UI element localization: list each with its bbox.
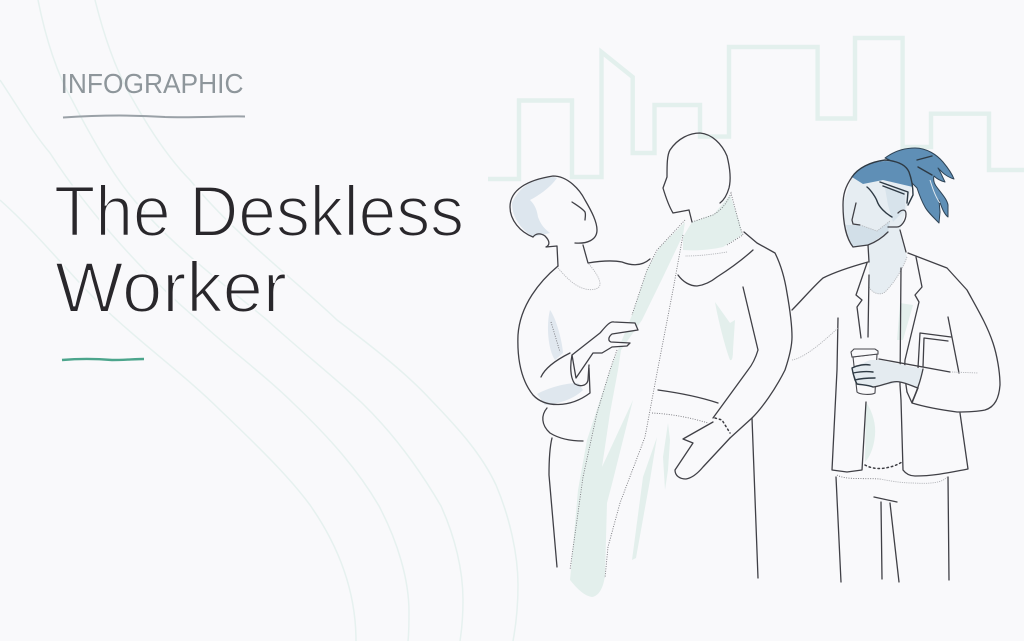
body [518, 266, 590, 405]
ponytail highlight [930, 180, 940, 203]
background curves [0, 0, 518, 641]
sweater [678, 250, 753, 286]
title [54, 173, 464, 328]
label underline [63, 116, 245, 118]
title: Worker [55, 249, 287, 328]
hand [572, 322, 638, 378]
title accent line [62, 359, 144, 360]
title: The Deskless [54, 173, 464, 252]
right leg [752, 418, 758, 578]
hair [852, 161, 913, 187]
ear and neck [533, 234, 558, 266]
trousers [836, 477, 949, 582]
beard and shade [846, 221, 890, 247]
face outline [843, 177, 888, 247]
face fill [843, 170, 912, 294]
neckline [558, 263, 600, 290]
sleeve shade [548, 310, 563, 360]
belly dots [865, 462, 902, 469]
waistband [837, 475, 880, 479]
ponytail [885, 148, 954, 223]
chest and belly shade [897, 303, 913, 340]
scarf outlines [692, 193, 743, 245]
lower body and leg [543, 408, 583, 441]
hair strands [867, 187, 892, 217]
jacket [792, 262, 868, 310]
scarf shade [570, 222, 685, 597]
hair shade [512, 177, 557, 237]
arm shade [537, 383, 583, 405]
figure: left person [510, 176, 650, 567]
neck [868, 230, 906, 262]
waist [658, 390, 718, 403]
figure: middle person [570, 133, 792, 597]
figure: right person [792, 148, 1000, 582]
label: INFOGRAPHIC: INFOGRAPHIC [60, 68, 244, 99]
hand [675, 422, 730, 479]
head [663, 133, 730, 213]
head [510, 176, 597, 243]
coffee cup and hand [851, 349, 978, 402]
ear [888, 210, 906, 227]
book [918, 333, 951, 368]
skyline [488, 38, 1024, 179]
